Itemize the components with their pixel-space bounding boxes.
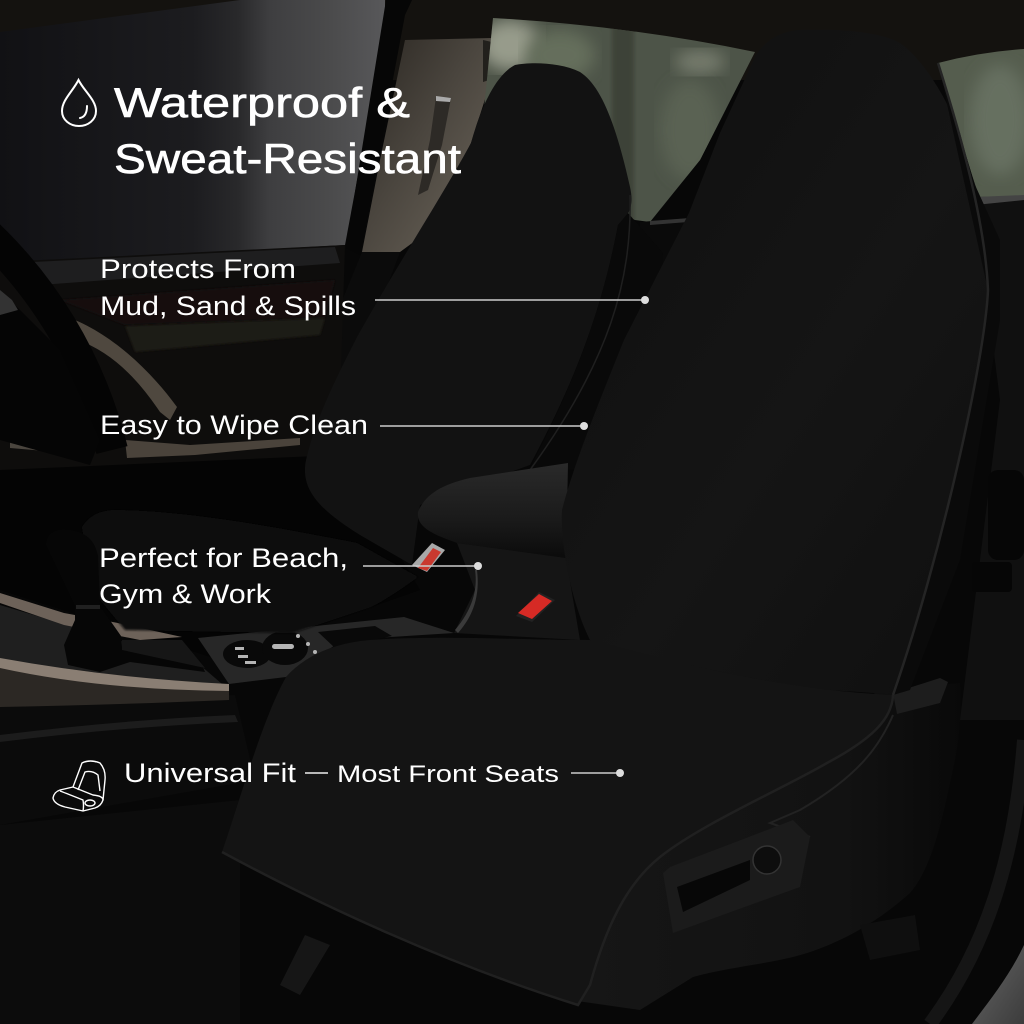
door panel: [0, 245, 345, 480]
main seat cover back: [562, 30, 999, 695]
seat belt buckle 1: [412, 543, 445, 572]
door window frame: [346, 0, 412, 255]
callout: easy to wipe clean: Easy to Wipe Clean: [100, 410, 368, 440]
callout: protects from mud, sand and spills: [100, 254, 649, 321]
icon: car seat: [53, 761, 105, 811]
door sill: [930, 740, 1024, 1024]
gear shifter: [46, 530, 205, 672]
rear window trees: [484, 18, 755, 222]
title: Waterproof &: [114, 79, 410, 126]
right window trees: [938, 49, 1024, 197]
center armrest: [418, 463, 568, 558]
callout: universal fit: [124, 758, 624, 788]
window switches: [223, 626, 392, 668]
dash trim: [0, 605, 229, 690]
callout: perfect for beach, gym and work: Perfect for Beach,: [99, 543, 348, 573]
seat base: [570, 683, 961, 1010]
lower dash: [0, 695, 255, 825]
door window: [0, 0, 385, 262]
callout: perfect for beach, gym and work: Gym & Work: [99, 579, 272, 609]
roof: [0, 0, 1024, 80]
seat control panel: [663, 820, 810, 933]
ledge under rear window: [640, 218, 690, 300]
driver seat cushion: [82, 510, 418, 633]
lower dark footwell: [0, 455, 420, 660]
seat belt anchor: [418, 97, 451, 195]
rear dark area right: [960, 200, 1024, 720]
door trim: [67, 317, 177, 420]
steering wheel: [0, 235, 112, 450]
b pillar: [362, 38, 492, 252]
callout: universal fit: Universal Fit: [124, 758, 297, 788]
console panel: [198, 617, 454, 684]
seat strap: [280, 935, 330, 995]
callout: protects from mud, sand and spills: Protects From: [100, 254, 296, 284]
floor mount: [860, 915, 920, 960]
console body: [454, 543, 580, 640]
callout: universal fit: Most Front Seats: [337, 761, 559, 788]
driver seat side bolster: [530, 213, 663, 470]
floor: [0, 800, 240, 1024]
callout: protects from mud, sand and spills: Mud, Sand & Spills: [100, 291, 356, 321]
driver seat back: [305, 63, 632, 565]
title: Sweat-Resistant: [114, 135, 461, 182]
title: [114, 79, 461, 182]
callout: easy to wipe clean: [100, 410, 588, 440]
seat belt buckle 2: [516, 592, 555, 622]
icon: water drop: [62, 80, 96, 126]
seat strap bracket: [893, 678, 948, 714]
main seat cover cushion: [222, 638, 893, 1005]
callout: perfect for beach, gym and work: [99, 543, 482, 609]
